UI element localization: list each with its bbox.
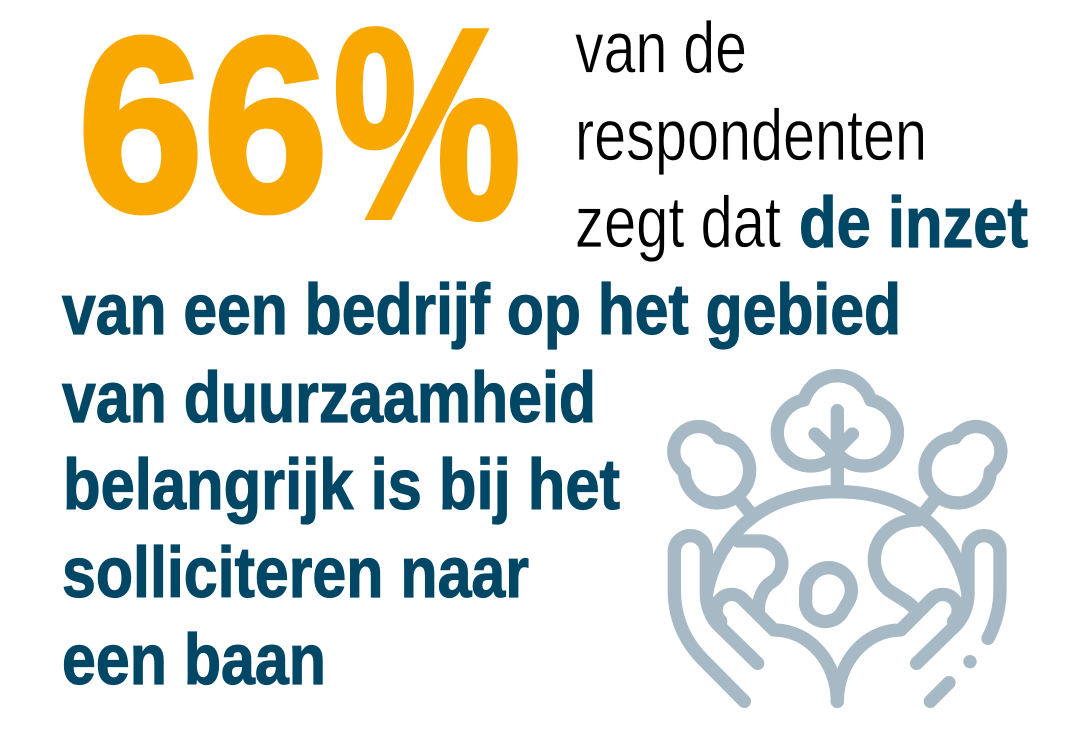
intro text: zegt dat	[575, 183, 781, 263]
main statement: een baan	[62, 621, 326, 700]
big number: 66%	[78, 0, 521, 275]
icon: centre tree	[777, 376, 897, 492]
main statement: van een bedrijf op het gebied	[62, 271, 901, 350]
icon: hands holding globe with trees	[674, 376, 1001, 701]
intro text: de inzet	[799, 184, 1028, 263]
intro text	[575, 8, 1028, 263]
main statement: belangrijk is bij het	[63, 446, 620, 525]
intro text: van de	[575, 8, 747, 88]
icon: globe	[707, 492, 968, 622]
icon: right hand	[837, 536, 1000, 701]
icon: left hand	[674, 536, 837, 701]
main statement: solliciteren naar	[62, 534, 529, 613]
main statement: van duurzaamheid	[62, 359, 596, 438]
main statement	[62, 271, 901, 700]
icon: left tree	[674, 427, 753, 517]
icon: right tree	[921, 427, 1001, 517]
intro text: respondenten	[575, 96, 927, 176]
